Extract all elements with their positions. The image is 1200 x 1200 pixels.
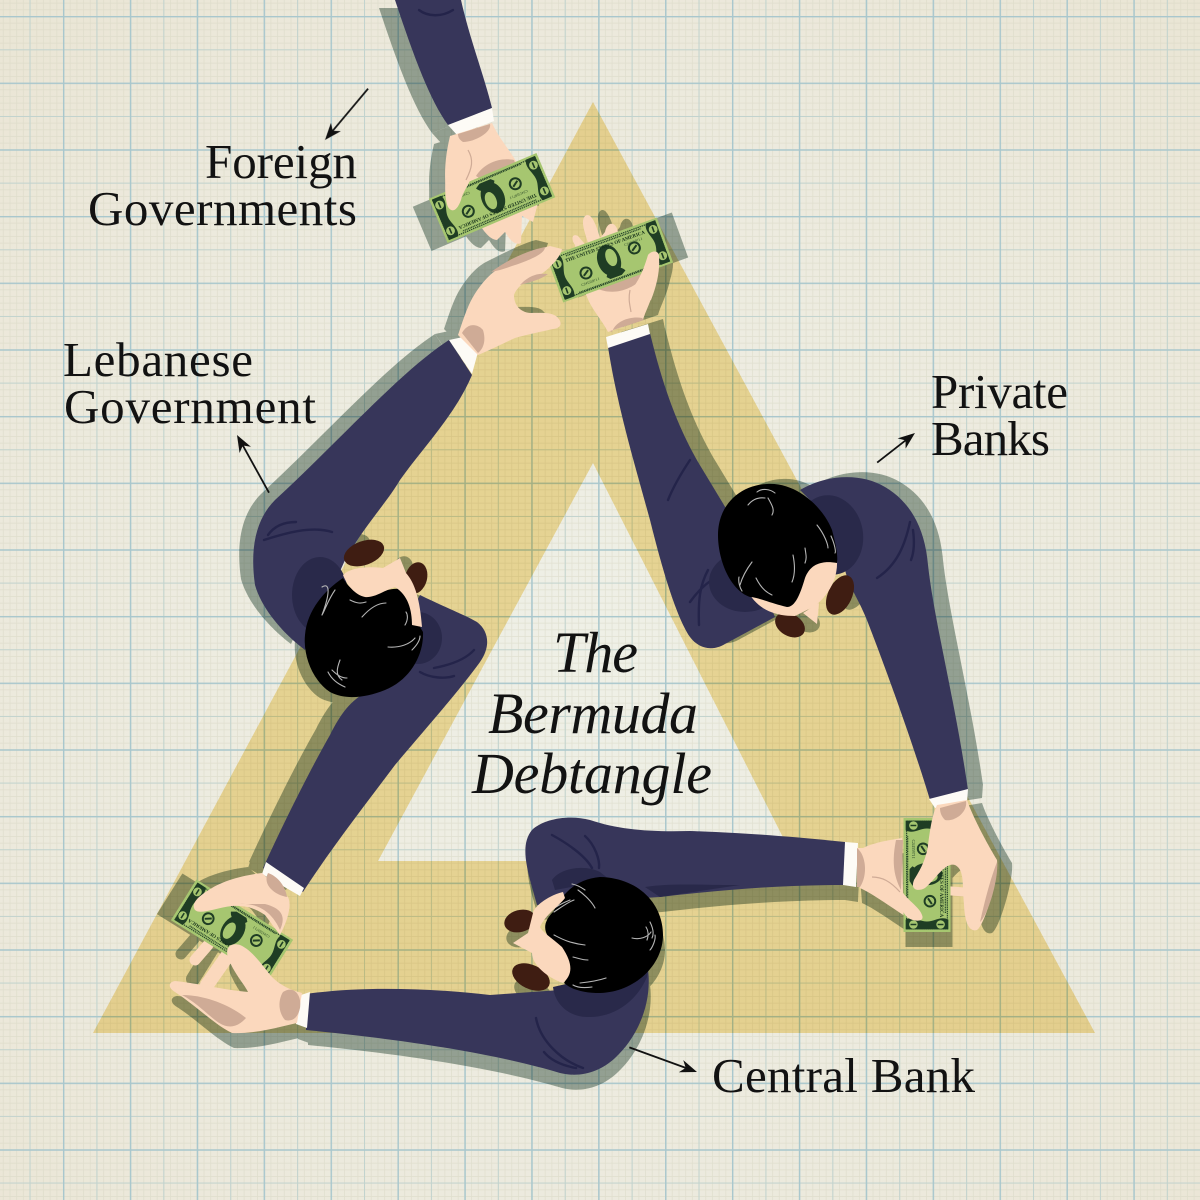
thumb: [631, 252, 659, 305]
upper hand: [572, 215, 658, 332]
dollar bill: THE UNITED STATES OF AMERICA: [457, 192, 537, 229]
dollar bill: C24155971 I: [911, 840, 915, 859]
dollar bill: [904, 818, 950, 932]
shoes: [771, 571, 860, 643]
upper hand: [458, 246, 562, 355]
label: lebanese government: Government: [64, 379, 316, 434]
cuff: [929, 789, 968, 808]
label: central bank: Central Bank: [712, 1048, 976, 1103]
title: Bermuda: [488, 681, 698, 746]
cuff: [448, 108, 494, 135]
lebanese thumb and palm: [194, 873, 290, 935]
hair: [305, 578, 423, 697]
title: The: [553, 620, 638, 685]
face: [343, 558, 422, 627]
arrow: lebanese government: [231, 432, 275, 496]
upper arm: [253, 340, 472, 650]
hair: [718, 484, 837, 607]
drop shadows: [157, 8, 1012, 1090]
label: foreign governments: Foreign: [205, 134, 357, 189]
right hand fingers behind bill: [940, 890, 964, 892]
upper arm: [525, 818, 845, 905]
dollar bill: C24155971 I: [252, 925, 271, 939]
thumb over bill: [898, 893, 923, 921]
label: foreign governments: [88, 134, 357, 236]
label: private banks: Private: [931, 364, 1068, 419]
lower hand cuff: [296, 992, 310, 1028]
thumb: [445, 148, 473, 210]
dollar bill: THE UNITED STATES OF AMERICA: [938, 833, 943, 918]
dollar bill: [171, 879, 293, 981]
dollar bill: C24155971 I: [508, 189, 528, 200]
figure: lebanese government: [195, 246, 562, 985]
dollar bill: THE UNITED STATES OF AMERICA: [565, 230, 646, 264]
label: private banks: [931, 364, 1068, 466]
dollar bill: [429, 153, 555, 243]
label: lebanese government: [63, 332, 316, 434]
lower fingers: [207, 945, 235, 985]
cuff: [606, 324, 650, 348]
private banks lower hand over bill: [913, 800, 997, 930]
label: foreign governments: Governments: [88, 181, 357, 236]
lower-left dollar bill and hands: [170, 873, 302, 1033]
title: Debtangle: [471, 741, 712, 806]
figure: foreign governments arm and hand: [395, 0, 555, 244]
lower arm: [306, 970, 649, 1075]
label: lebanese government: Lebanese: [63, 332, 253, 387]
face: [513, 892, 570, 983]
cuff: [449, 336, 478, 374]
cuff: [843, 842, 858, 887]
face: [750, 540, 837, 624]
shoes: [502, 906, 554, 996]
arrow: private banks: [873, 428, 919, 468]
shoulder and right arm: [800, 477, 968, 800]
palm: [445, 123, 540, 244]
figure: central bank: [296, 818, 964, 1075]
cuff: [262, 862, 304, 896]
central bank hand: [170, 944, 302, 1033]
gold triangle: [93, 102, 1095, 1033]
figure: private banks: [547, 215, 968, 808]
title: [471, 620, 712, 806]
sleeve: [395, 0, 492, 125]
arrow: central bank: [627, 1041, 699, 1078]
dollar bill: C24155971 I: [581, 277, 601, 287]
dollar bill: [547, 217, 673, 303]
dollar bill: C24155971 I: [624, 237, 644, 247]
dollar bill: C24155971 I: [451, 191, 470, 202]
arrow: foreign governments: [320, 84, 373, 144]
shoes: [340, 535, 431, 596]
dollar bill: THE UNITED STATES OF AMERICA: [187, 917, 262, 966]
label: private banks: Banks: [931, 411, 1050, 466]
left arm: [608, 333, 775, 648]
hair: [545, 877, 663, 993]
lower arm: [263, 595, 487, 892]
